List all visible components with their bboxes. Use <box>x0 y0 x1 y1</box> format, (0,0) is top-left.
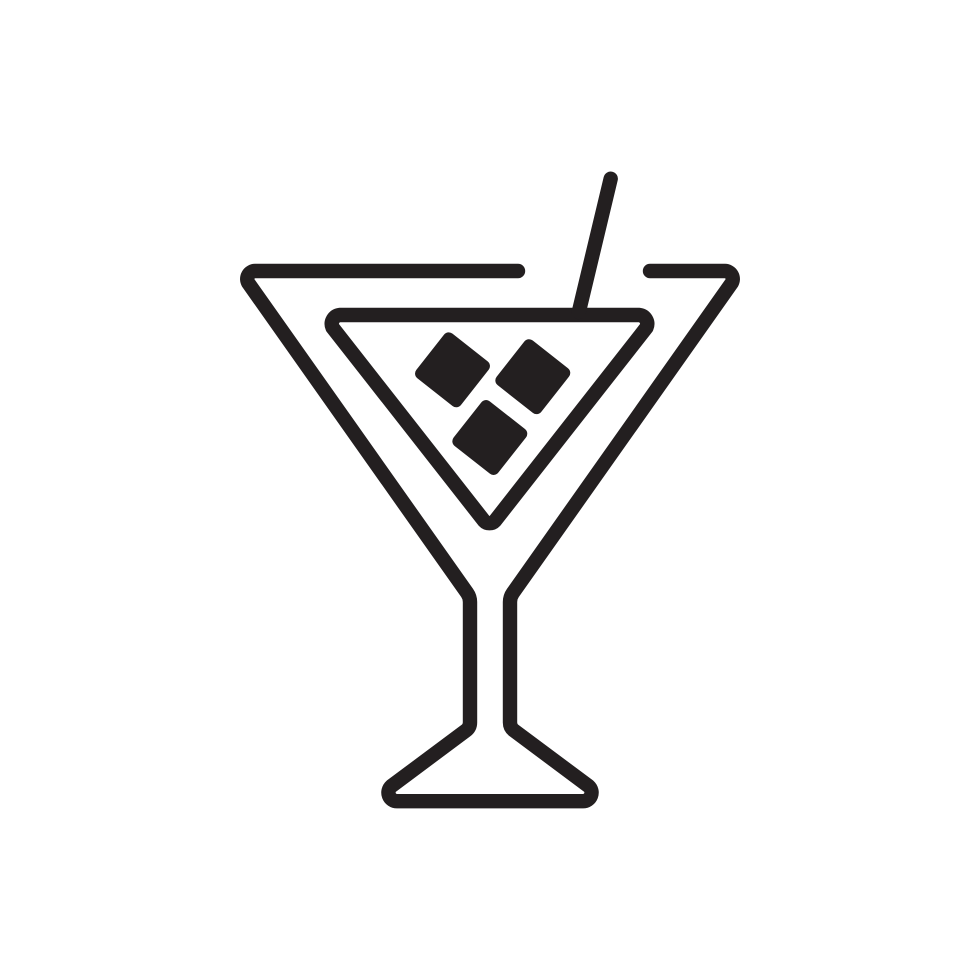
inner liquid triangle <box>332 315 647 523</box>
ice cube right <box>493 337 573 417</box>
straw <box>579 179 611 312</box>
glass outline <box>247 271 733 801</box>
ice cube left <box>413 330 492 410</box>
ice cube bottom <box>450 398 530 477</box>
ice cubes <box>413 330 573 477</box>
